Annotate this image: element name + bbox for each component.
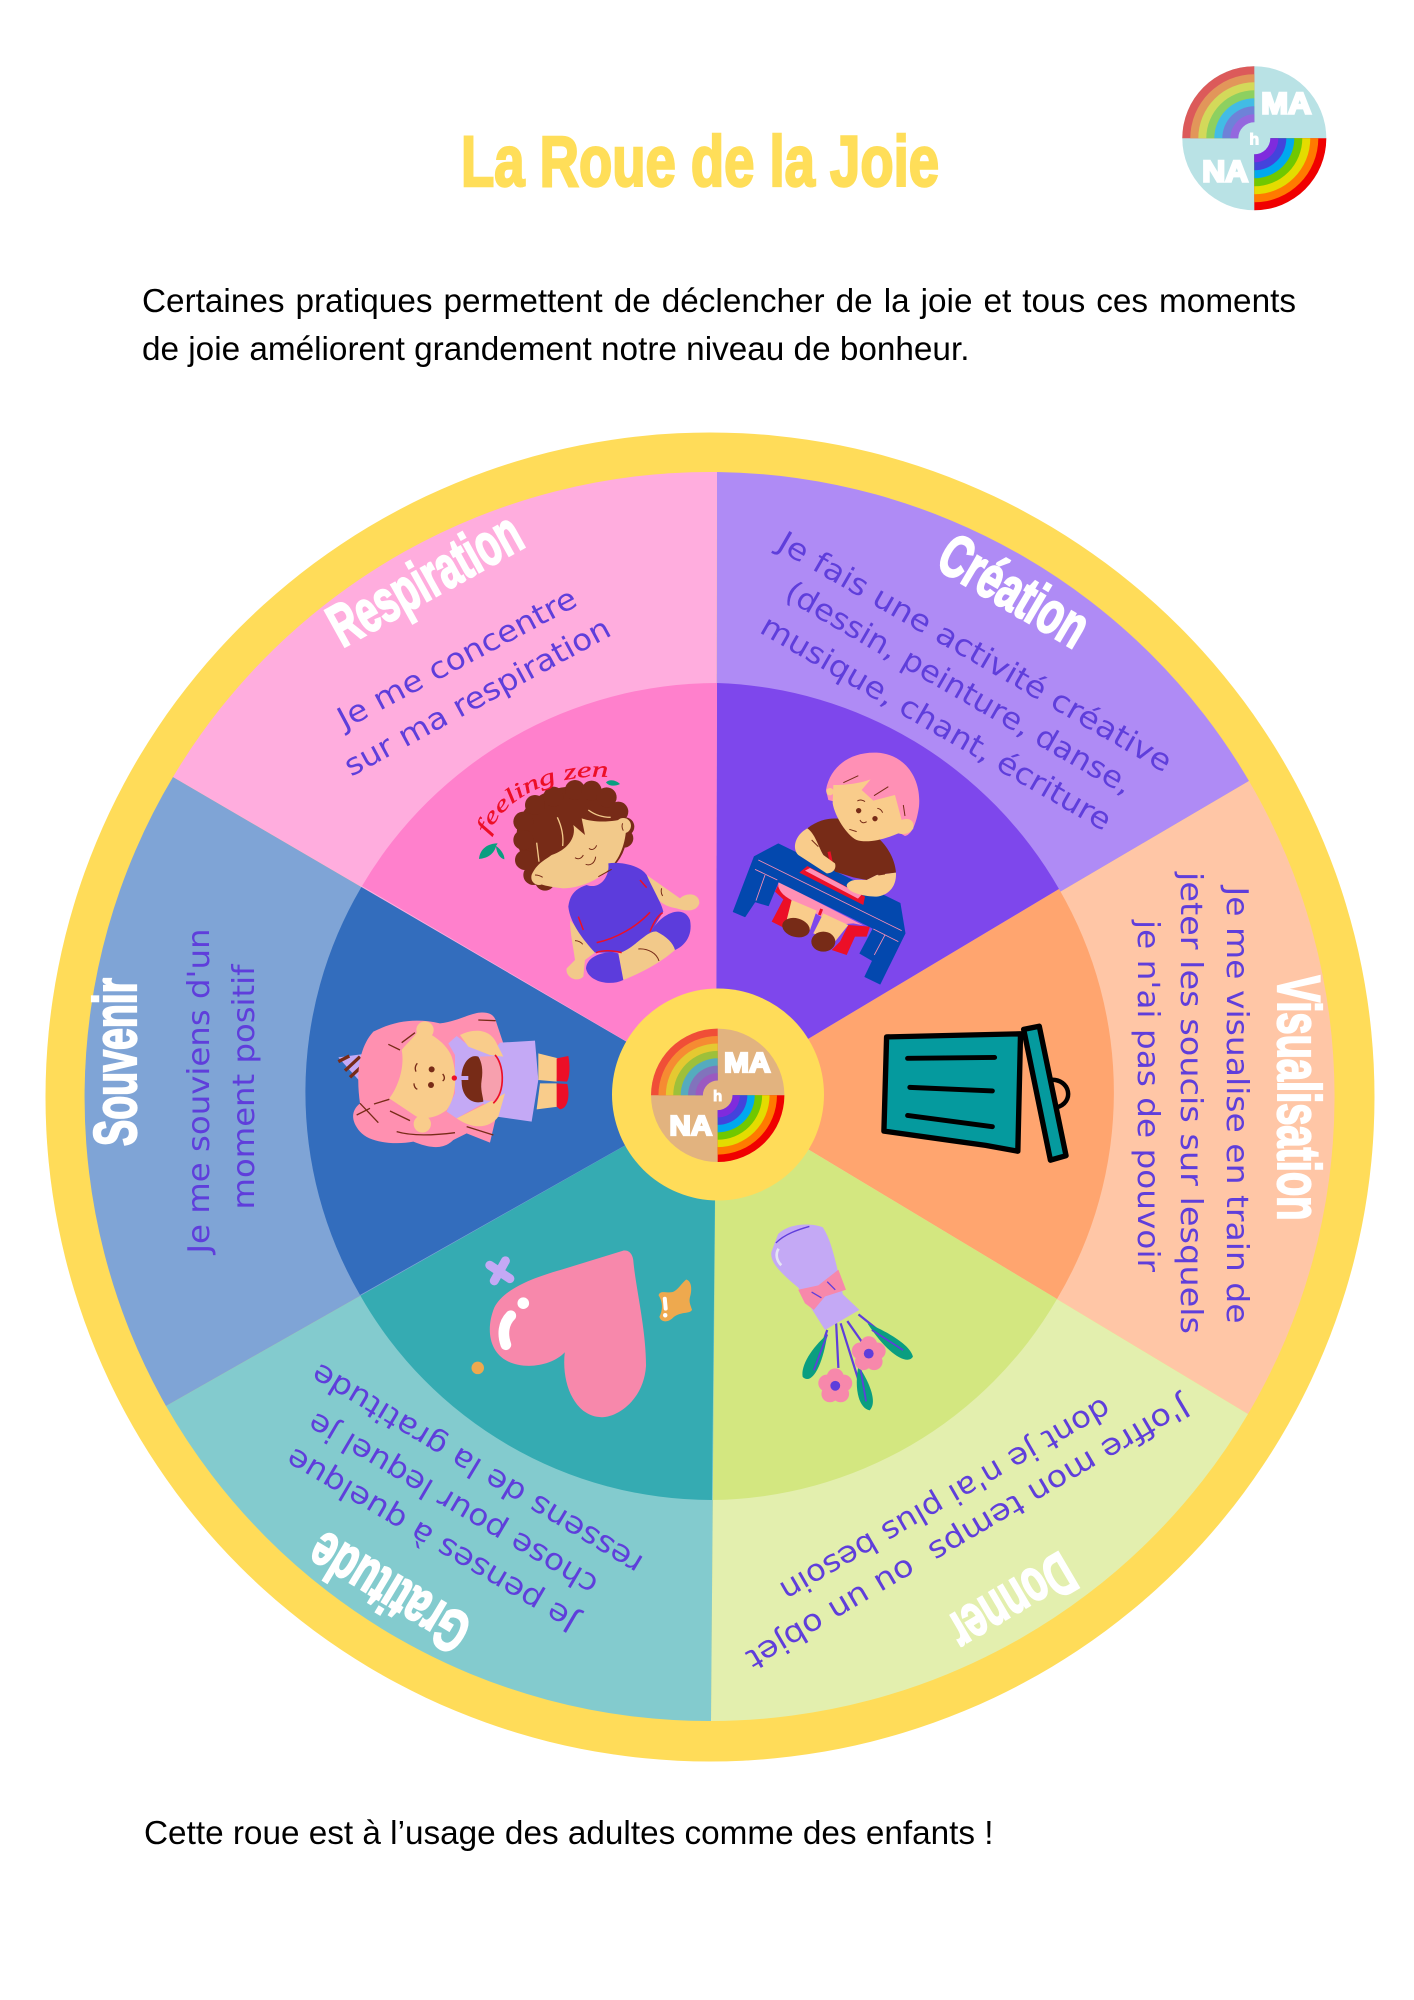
logo: centre rainbow badge: NA	[670, 1110, 712, 1141]
text: Visualisation description: je n'ai pas de pouvoir	[1130, 919, 1165, 1273]
heading: Création: Création	[927, 520, 1101, 661]
logo: centre rainbow badge	[651, 1029, 784, 1162]
text: Création description: musique, chant, écriture	[754, 609, 1117, 838]
heading: Respiration: Respiration	[316, 499, 533, 660]
icon: trash bin	[884, 1026, 1068, 1160]
text: Création description	[754, 524, 1178, 838]
panel: Souvenir	[82, 777, 716, 1406]
logo: centre rainbow badge: h	[713, 1089, 722, 1105]
text: feeling zen: feeling zen	[478, 766, 608, 837]
heading: Donner: Donner	[938, 1539, 1088, 1666]
text: Visualisation description	[1130, 871, 1254, 1334]
panel: Création	[716, 472, 1249, 1094]
hub: yellow centre circle	[612, 988, 824, 1200]
logo: MA h NA rainbow badge: NA	[1202, 155, 1248, 188]
logo: MA h NA rainbow badge: MA	[1261, 87, 1311, 120]
heading: Gratitude: Gratitude	[296, 1519, 481, 1667]
logo: MA h NA rainbow badge: h	[1249, 131, 1259, 148]
text: Souvenir description: Je me souviens d'un	[182, 928, 217, 1256]
text: Gratitude description: Je penses à quelque	[280, 1440, 586, 1640]
logo: MA h NA rainbow badge	[1182, 66, 1326, 210]
text: Souvenir description: moment positif	[227, 963, 262, 1209]
text: Création description: (dessin, peinture, danse,	[779, 575, 1139, 802]
text: Visualisation description: jeter les soucis sur lesquels	[1173, 871, 1208, 1334]
text: Visualisation description: Je me visualise en train de	[1219, 884, 1254, 1324]
logo: centre rainbow badge: MA	[724, 1047, 770, 1078]
text: Souvenir description	[182, 928, 262, 1256]
text: Création description: Je fais une activité créative	[770, 524, 1178, 780]
icon: meditating child with feeling zen lettering	[478, 766, 700, 983]
text: Respiration description: sur ma respiration	[338, 611, 617, 784]
text: Gratitude description: chose pour lequel je	[302, 1405, 604, 1602]
text: Donner description: J'offre mon temps ou un objet	[740, 1387, 1197, 1677]
intro text: de joie améliorent grandement notre niveau de bonheur.	[142, 331, 969, 368]
closing text: Cette roue est à l’usage des adultes comme des enfants !	[144, 1815, 994, 1852]
text: Gratitude description	[280, 1356, 649, 1640]
text: Gratitude description: ressens de la gratitude	[305, 1356, 649, 1581]
intro text: Certaines pratiques permettent de déclencher de la joie et tous ces moments	[142, 283, 1296, 320]
panel: Donner	[711, 1094, 1248, 1721]
heading: Visualisation: Visualisation	[1265, 976, 1332, 1220]
text: Donner description: dont je n'ai plus besoin	[774, 1390, 1117, 1608]
intro text	[142, 283, 1296, 368]
title: La Roue de la Joie	[461, 123, 939, 202]
text: Respiration description: Je me concentre	[330, 581, 583, 738]
icon: girl with pink hair holding a birthday cake	[338, 1013, 570, 1147]
icon: child drawing at a desk	[733, 753, 919, 984]
icon: flower bouquet in a bow-tied wrap	[771, 1225, 913, 1410]
panel: Visualisation	[716, 781, 1335, 1414]
heading: Souvenir: Souvenir	[82, 978, 149, 1146]
panel: Respiration	[173, 472, 717, 1042]
panel: Gratitude	[166, 1094, 716, 1721]
outer yellow ring of the wheel	[46, 432, 1374, 1762]
icon: pink heart with sparkles	[471, 1250, 692, 1417]
